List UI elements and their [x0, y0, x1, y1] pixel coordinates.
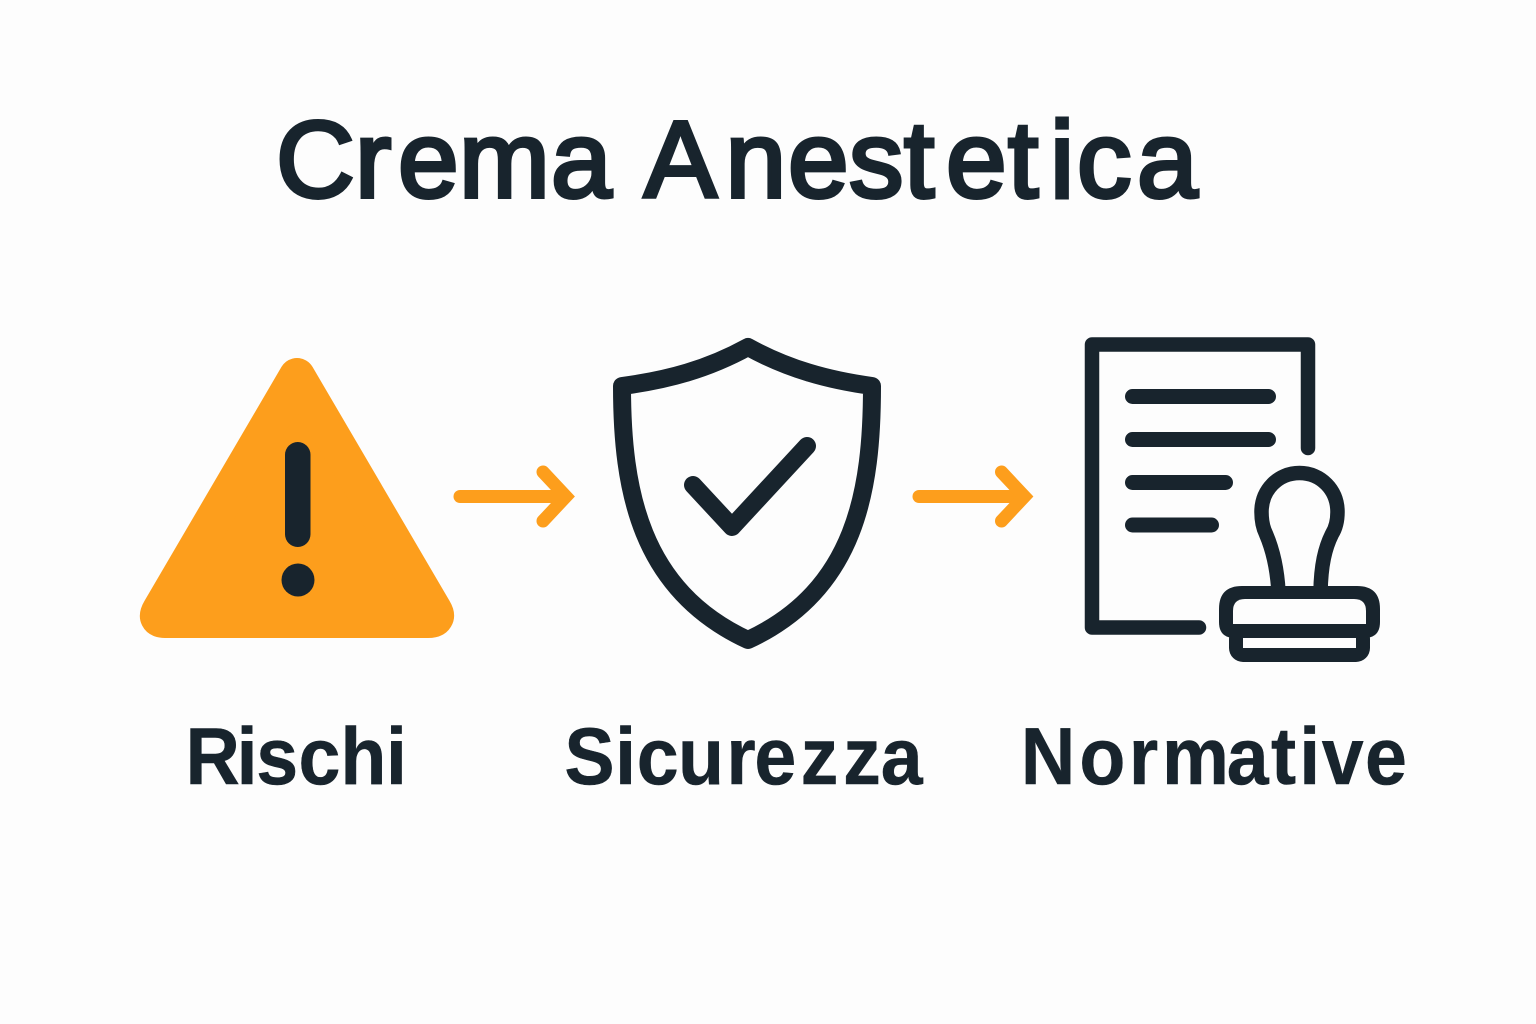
- icon: document with stamp: [1092, 344, 1380, 662]
- label: Rischi: Rischi: [186, 710, 407, 802]
- document outline: [1092, 344, 1308, 628]
- arrow: risks to safety: [460, 472, 566, 521]
- icon: warning triangle: [158, 376, 436, 620]
- icon: shield with check: [622, 347, 872, 640]
- label: Normative: Normative: [1021, 710, 1407, 802]
- arrow: safety to regulations: [919, 472, 1024, 521]
- document text lines: [1132, 396, 1268, 525]
- label: Sicurezza: Sicurezza: [564, 710, 923, 802]
- stamp: [1219, 473, 1380, 662]
- title: Crema Anestetica: [276, 99, 1198, 221]
